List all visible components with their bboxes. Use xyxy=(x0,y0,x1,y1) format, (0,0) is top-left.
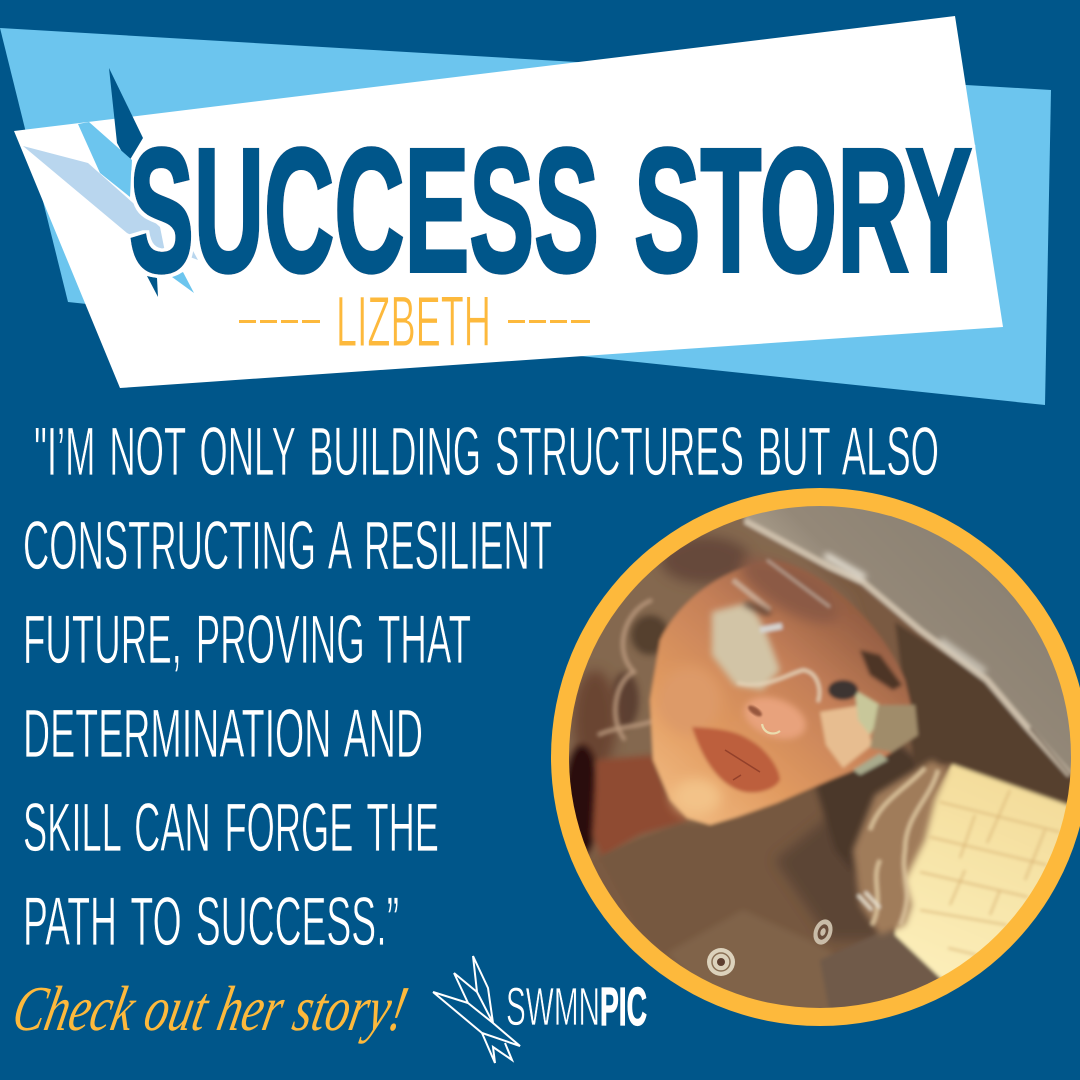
nose ring xyxy=(762,724,780,733)
safety glasses lenses xyxy=(712,560,918,775)
neck xyxy=(592,755,690,857)
jacket buttons xyxy=(707,917,836,976)
nostril xyxy=(747,704,763,718)
lip line and highlight xyxy=(725,750,760,780)
light blue back banner xyxy=(0,28,1051,405)
hard hat xyxy=(743,490,1080,775)
logo wordmark: SWMN xyxy=(506,977,600,1037)
icon: arrow logo behind title xyxy=(23,68,198,297)
portrait photo in gold ring xyxy=(551,488,1080,1030)
logo: SWMNPIC xyxy=(433,956,647,1063)
subtitle: name with dashes: LIZBETH xyxy=(336,283,491,362)
hair xyxy=(569,518,838,855)
tiled wall xyxy=(895,763,1080,990)
quote text: FUTURE, PROVING THAT xyxy=(23,601,471,678)
quote text: DETERMINATION AND xyxy=(23,695,423,772)
title: SUCCESS xyxy=(129,113,599,309)
blond hair strands xyxy=(853,760,948,935)
lips xyxy=(692,727,780,792)
quote text xyxy=(23,413,939,960)
subtitle: name with dashes xyxy=(239,283,590,362)
logo: SWMNPIC: PIC xyxy=(600,977,647,1037)
nose xyxy=(742,695,808,741)
quote text: SKILL CAN FORGE THE xyxy=(23,789,439,866)
face xyxy=(650,545,918,825)
beige wall sliver xyxy=(1062,695,1080,780)
jacket xyxy=(605,746,937,1008)
under-brim shadow xyxy=(895,622,1072,806)
quote text: PATH TO SUCCESS.” xyxy=(23,883,399,960)
call to action script: Check out her story! xyxy=(7,973,414,1044)
quote text: CONSTRUCTING A RESILIENT xyxy=(23,507,552,584)
icon: arrow logo outline xyxy=(433,956,520,1063)
white front banner xyxy=(14,16,1003,388)
